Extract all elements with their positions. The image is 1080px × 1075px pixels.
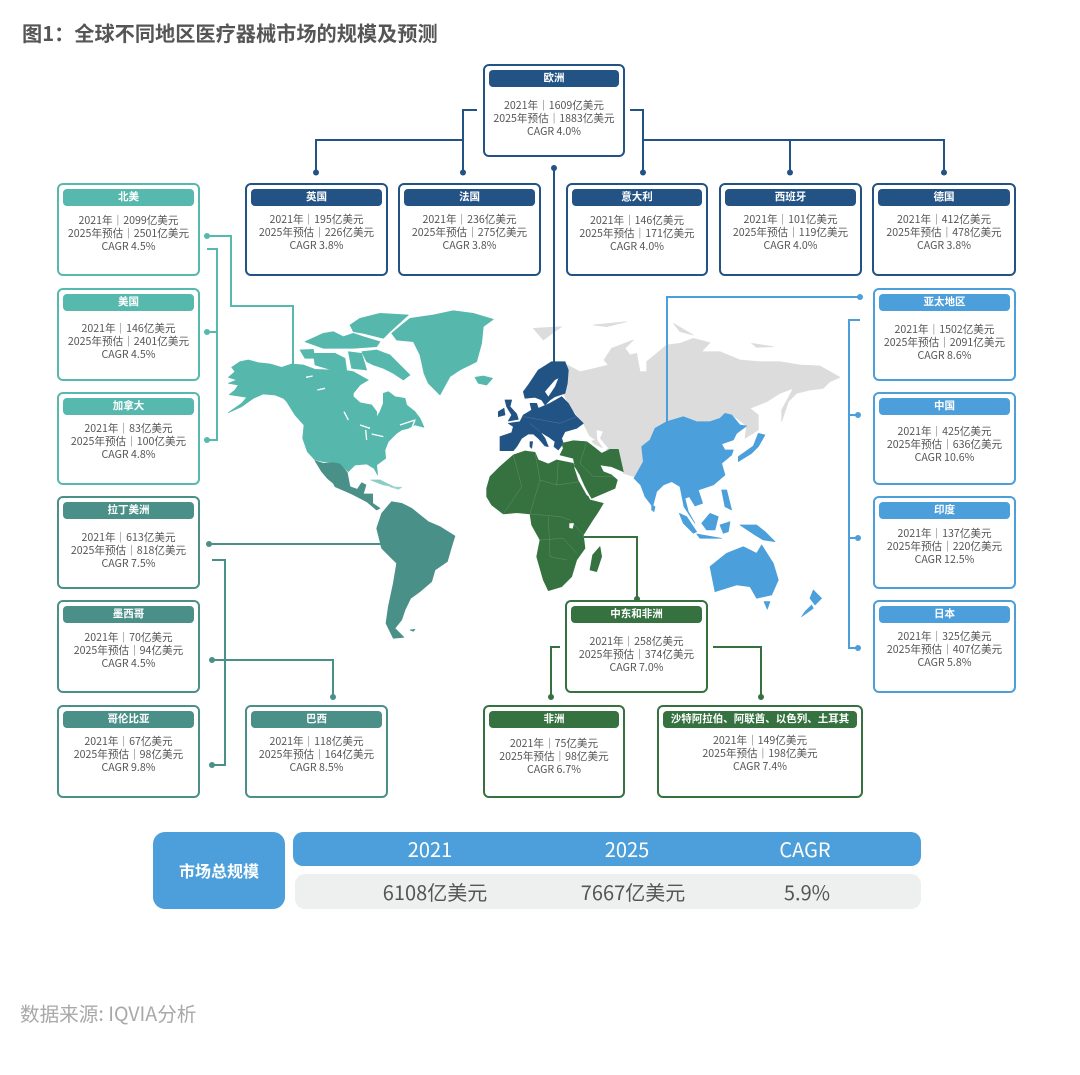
figures: Italy — [579, 213, 695, 254]
heading: Latin America — [63, 502, 194, 519]
figures: Colombia: 2025年预估｜98亿美元 — [74, 747, 183, 762]
value: 2021: 6108亿美元 — [383, 877, 487, 906]
figures: Japan — [887, 629, 1002, 670]
heading: Spain — [725, 189, 856, 206]
figures: Canada: 2025年预估｜100亿美元 — [71, 434, 186, 449]
panel: Colombia — [57, 705, 200, 798]
heading: Japan — [879, 606, 1010, 623]
figures: North America — [68, 213, 189, 254]
figures: Saudi Arabia, UAE, Israel, Turkey: CAGR 7.4% — [733, 759, 787, 774]
panel: Germany — [872, 183, 1016, 276]
heading: Germany — [878, 189, 1010, 206]
figures: Europe — [493, 98, 615, 139]
figures: Africa: CAGR 6.7% — [527, 762, 581, 777]
panel: Japan — [873, 600, 1016, 693]
figures: Africa — [499, 736, 609, 777]
heading: UK — [251, 189, 382, 206]
panel: UK — [245, 183, 388, 276]
heading: UK: 英国 — [306, 189, 327, 204]
title: 图1：全球不同地区医疗器械市场的规模及预测 — [22, 18, 438, 47]
map: world regions — [228, 311, 840, 638]
heading: India — [879, 502, 1010, 519]
figures: Middle East and Africa: 2025年预估｜374亿美元 — [579, 647, 694, 662]
heading: China — [879, 398, 1010, 415]
figures: China: 2021年｜425亿美元 — [897, 424, 992, 439]
figures: North America: 2021年｜2099亿美元 — [78, 213, 178, 228]
figures: China — [887, 424, 1002, 465]
figures: France: CAGR 3.8% — [443, 238, 496, 253]
region: latin america — [315, 461, 455, 638]
figures: France: 2021年｜236亿美元 — [422, 212, 517, 227]
figures: USA: 2021年｜146亿美元 — [81, 321, 176, 336]
figures: Spain — [733, 212, 848, 253]
figures: India: 2021年｜137亿美元 — [897, 526, 992, 541]
figures: Brazil — [259, 734, 374, 775]
heading: France: 法国 — [459, 189, 480, 204]
panel: USA — [57, 288, 200, 381]
figures: Middle East and Africa: 2021年｜258亿美元 — [589, 634, 684, 649]
connector: asia pacific — [667, 294, 863, 651]
figures: Colombia: CAGR 9.8% — [102, 760, 155, 775]
figures: Spain: 2021年｜101亿美元 — [743, 212, 838, 227]
figures: Europe: 2021年｜1609亿美元 — [504, 98, 604, 113]
caspian sea — [597, 430, 608, 449]
figures: North America: CAGR 4.5% — [102, 239, 155, 254]
panel: Mexico — [57, 600, 200, 693]
figures: India: CAGR 12.5% — [915, 552, 974, 567]
figures: Latin America: 2025年预估｜818亿美元 — [71, 543, 186, 558]
panel: Italy — [566, 183, 708, 276]
heading: Africa: 非洲 — [544, 711, 564, 726]
heading: USA — [63, 294, 194, 311]
baltic sea — [545, 378, 558, 397]
country borders — [503, 417, 617, 560]
figures: Germany: 2021年｜412亿美元 — [897, 212, 991, 227]
figures: Japan: 2025年预估｜407亿美元 — [887, 642, 1002, 657]
heading: India: 印度 — [934, 502, 955, 517]
figures: Germany: 2025年预估｜478亿美元 — [886, 225, 1002, 240]
panel: India — [873, 496, 1016, 589]
figures: USA: CAGR 4.5% — [102, 347, 155, 362]
map: americas — [228, 311, 493, 638]
region: north america — [228, 311, 493, 489]
heading: Canada — [63, 398, 194, 415]
figures: Asia Pacific: CAGR 8.6% — [918, 348, 971, 363]
panel: Canada — [57, 392, 200, 485]
figures: Colombia — [74, 734, 183, 775]
heading: Saudi Arabia, UAE, Israel, Turkey: 沙特阿拉伯、阿联酋、以色列、土耳其 — [671, 711, 849, 726]
header: CAGR: CAGR — [779, 834, 831, 863]
black sea — [563, 432, 595, 442]
heading: Middle East and Africa: 中东和非洲 — [610, 606, 663, 621]
heading: Colombia: 哥伦比亚 — [108, 711, 150, 726]
figures: Spain: 2025年预估｜119亿美元 — [733, 225, 848, 240]
figures: USA — [68, 321, 189, 362]
heading: Europe: 欧洲 — [544, 70, 564, 85]
heading: North America — [63, 189, 194, 206]
figures: Africa: 2021年｜75亿美元 — [510, 736, 598, 751]
heading: France — [404, 189, 535, 206]
figures: Mexico: 2021年｜70亿美元 — [84, 630, 173, 645]
figures: Asia Pacific: 2021年｜1502亿美元 — [894, 322, 994, 337]
panel: Europe — [483, 64, 625, 157]
figures: Latin America: CAGR 7.5% — [102, 556, 155, 571]
heading: Italy: 意大利 — [621, 189, 653, 204]
figures: China: 2025年预估｜636亿美元 — [887, 437, 1002, 452]
header: 2025: 2025 — [605, 834, 649, 863]
panel: China — [873, 392, 1016, 485]
heading: Middle East and Africa — [571, 606, 702, 623]
summary values bar — [295, 874, 921, 909]
heading: Spain: 西班牙 — [775, 189, 806, 204]
connector: north america — [204, 233, 293, 443]
figures: Spain: CAGR 4.0% — [764, 238, 817, 253]
connector: middle east and africa — [548, 537, 764, 700]
heading: Asia Pacific: 亚太地区 — [924, 294, 966, 309]
figures: Canada: 2021年｜83亿美元 — [84, 421, 173, 436]
source note: 数据来源: IQVIA分析 — [20, 998, 196, 1027]
figures: Latin America — [71, 530, 186, 571]
summary header bar — [293, 832, 921, 866]
value: 2025: 7667亿美元 — [581, 877, 685, 906]
figures: Asia Pacific — [884, 322, 1005, 363]
figures: Europe: CAGR 4.0% — [527, 124, 581, 139]
figures: Saudi Arabia, UAE, Israel, Turkey: 2025年预估｜198亿美元 — [702, 746, 818, 761]
heading: Mexico: 墨西哥 — [113, 606, 144, 621]
figures: Germany: CAGR 3.8% — [917, 238, 971, 253]
figures: Africa: 2025年预估｜98亿美元 — [499, 749, 609, 764]
figures: Saudi Arabia, UAE, Israel, Turkey — [702, 733, 818, 774]
figures: China: CAGR 10.6% — [915, 450, 974, 465]
figures: Saudi Arabia, UAE, Israel, Turkey: 2021年｜149亿美元 — [713, 733, 807, 748]
panel: Saudi Arabia, UAE, Israel, Turkey — [657, 705, 863, 798]
figures: USA: 2025年预估｜2401亿美元 — [68, 334, 189, 349]
figures: Canada: CAGR 4.8% — [102, 447, 155, 462]
map: eurasia, africa, oceania — [487, 322, 840, 617]
figures: Latin America: 2021年｜613亿美元 — [81, 530, 176, 545]
heading: USA: 美国 — [118, 294, 139, 309]
heading: China: 中国 — [934, 398, 955, 413]
heading: Asia Pacific — [879, 294, 1010, 311]
figures: India — [887, 526, 1002, 567]
value: CAGR: 5.9% — [784, 877, 830, 906]
figures: France — [412, 212, 527, 253]
figures: Europe: 2025年预估｜1883亿美元 — [493, 111, 615, 126]
figures: Mexico — [74, 630, 183, 671]
figures: Middle East and Africa: CAGR 7.0% — [610, 660, 663, 675]
figures: Canada — [71, 421, 186, 462]
figures: Brazil: 2021年｜118亿美元 — [269, 734, 364, 749]
region: asia pacific — [634, 413, 822, 617]
figures: India: 2025年预估｜220亿美元 — [887, 539, 1002, 554]
heading: Brazil — [251, 711, 382, 728]
panel: Africa — [483, 705, 625, 798]
panel: Asia Pacific — [873, 288, 1016, 381]
figures: UK: CAGR 3.8% — [290, 238, 343, 253]
heading: Japan: 日本 — [934, 606, 955, 621]
figures: North America: 2025年预估｜2501亿美元 — [68, 226, 189, 241]
figures: Brazil: 2025年预估｜164亿美元 — [259, 747, 374, 762]
great african lakes and red sea — [569, 523, 574, 529]
lakes — [306, 376, 415, 440]
heading: North America: 北美 — [118, 189, 139, 204]
heading: Italy — [572, 189, 702, 206]
connector: europe — [313, 110, 947, 362]
region: rest of eurasia — [533, 322, 840, 477]
figures: Brazil: CAGR 8.5% — [290, 760, 343, 775]
heading: Brazil: 巴西 — [306, 711, 327, 726]
figures: Germany — [886, 212, 1002, 253]
panel: Latin America — [57, 496, 200, 589]
figures: France: 2025年预估｜275亿美元 — [412, 225, 527, 240]
figures: Colombia: 2021年｜67亿美元 — [84, 734, 173, 749]
heading: Canada: 加拿大 — [113, 398, 144, 413]
panel: France — [398, 183, 541, 276]
figures: Middle East and Africa — [579, 634, 694, 675]
heading: Germany: 德国 — [934, 189, 954, 204]
figures: UK: 2025年预估｜226亿美元 — [259, 225, 374, 240]
summary label: total market size: 市场总规模 — [179, 858, 259, 882]
figures: Italy: 2021年｜146亿美元 — [590, 213, 684, 228]
heading: Colombia — [63, 711, 194, 728]
figures: Asia Pacific: 2025年预估｜2091亿美元 — [884, 335, 1005, 350]
heading: Africa — [489, 711, 619, 728]
panel: Spain — [719, 183, 862, 276]
figures: UK — [259, 212, 374, 253]
panel: Middle East and Africa — [565, 600, 708, 693]
panel: North America — [57, 183, 200, 276]
region: middle east and africa — [487, 441, 623, 591]
header: 2021: 2021 — [408, 834, 452, 863]
heading: Europe — [489, 70, 619, 87]
figures: Japan: 2021年｜325亿美元 — [897, 629, 992, 644]
heading: Latin America: 拉丁美洲 — [108, 502, 150, 517]
connector: latin america — [206, 541, 385, 768]
region: europe — [498, 362, 583, 451]
figures: UK: 2021年｜195亿美元 — [269, 212, 364, 227]
figures: Italy: 2025年预估｜171亿美元 — [579, 226, 695, 241]
summary label: total market size — [153, 832, 285, 909]
figures: Japan: CAGR 5.8% — [918, 655, 971, 670]
figures: Italy: CAGR 4.0% — [610, 239, 664, 254]
figures: Mexico: CAGR 4.5% — [102, 656, 155, 671]
figures: Mexico: 2025年预估｜94亿美元 — [74, 643, 183, 658]
panel: Brazil — [245, 705, 388, 798]
heading: Mexico — [63, 606, 194, 623]
